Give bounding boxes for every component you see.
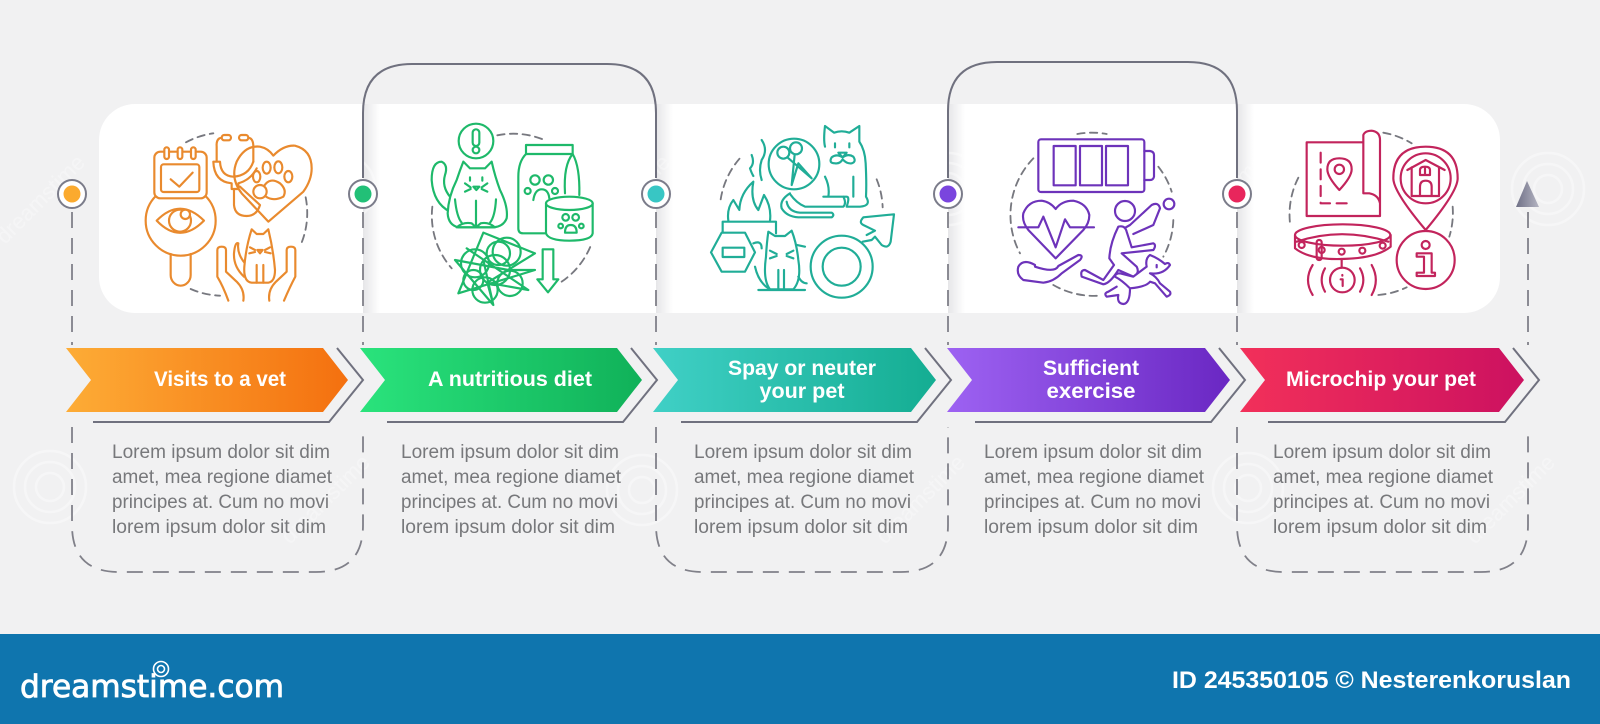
text block 3: amet, mea regione diamet — [694, 467, 915, 488]
watermark: dreamstime — [276, 450, 375, 549]
chevron: spay or neuter your pet — [653, 348, 951, 422]
node: red — [1223, 180, 1251, 208]
text block 3: lorem ipsum dolor sit dim — [694, 517, 908, 538]
node: orange — [58, 180, 86, 208]
watermark: dreamstime — [576, 150, 675, 249]
watermark: dreamstime — [1171, 150, 1270, 249]
chevron: spay or neuter your pet: Spay or neuter — [728, 357, 876, 380]
icon: sufficient exercise — [1010, 133, 1174, 304]
text block 2: principes at. Cum no movi — [401, 492, 618, 513]
chevron: microchip your pet: Microchip your pet — [1286, 368, 1476, 391]
watermark — [0, 150, 1584, 549]
text block 2: lorem ipsum dolor sit dim — [401, 517, 615, 538]
text block 4: lorem ipsum dolor sit dim — [984, 517, 1198, 538]
end arrow: triangle — [1516, 181, 1539, 207]
chevron: sufficient exercise: Sufficient — [1043, 357, 1139, 380]
text block 3: Lorem ipsum dolor sit dim — [694, 442, 912, 463]
chevron: sufficient exercise — [947, 348, 1245, 422]
chevron: visits to a vet — [66, 348, 363, 422]
text block 5: Lorem ipsum dolor sit dim — [1273, 442, 1491, 463]
chevron: a nutritious diet — [360, 348, 657, 422]
text block 1: Lorem ipsum dolor sit dim — [112, 442, 330, 463]
image credit: ID 245350105 © Nesterenkoruslan — [1172, 667, 1571, 694]
chevron: visits to a vet: Visits to a vet — [154, 368, 286, 391]
watermark: dreamstime — [1461, 450, 1560, 549]
text block 4 — [984, 442, 1205, 538]
white icon panel — [99, 104, 1500, 313]
text block 5 — [1273, 442, 1494, 538]
text block 1: lorem ipsum dolor sit dim — [112, 517, 326, 538]
text block 5: lorem ipsum dolor sit dim — [1273, 517, 1487, 538]
icon: vet visits — [146, 133, 312, 301]
text block 5: principes at. Cum no movi — [1273, 492, 1490, 513]
text block 3 — [694, 442, 915, 538]
text block 4: amet, mea regione diamet — [984, 467, 1205, 488]
text block 2: Lorem ipsum dolor sit dim — [401, 442, 619, 463]
footer bar — [0, 634, 1600, 724]
logo: dreamstime.com — [20, 669, 284, 705]
text block 1: amet, mea regione diamet — [112, 467, 333, 488]
text block 5: amet, mea regione diamet — [1273, 467, 1494, 488]
chevron: microchip your pet — [1240, 348, 1539, 422]
watermark: dreamstime — [871, 450, 970, 549]
chevron: a nutritious diet: A nutritious diet — [428, 368, 592, 391]
node: teal — [642, 180, 670, 208]
text block 2: amet, mea regione diamet — [401, 467, 622, 488]
text block 2 — [401, 442, 622, 538]
text block 1: principes at. Cum no movi — [112, 492, 329, 513]
icon: nutritious diet — [432, 124, 593, 305]
text block 1 — [112, 442, 333, 538]
node: purple — [934, 180, 962, 208]
chevron: sufficient exercise: exercise — [1046, 380, 1136, 403]
text block 4: principes at. Cum no movi — [984, 492, 1201, 513]
node: green — [349, 180, 377, 208]
text block 4: Lorem ipsum dolor sit dim — [984, 442, 1202, 463]
connector: dashed lines and bottom loops — [72, 212, 1528, 572]
text block 3: principes at. Cum no movi — [694, 492, 911, 513]
connector: top loops — [363, 62, 1237, 178]
icon: spay or neuter — [711, 126, 894, 298]
icon: microchip — [1290, 131, 1458, 295]
chevron: spay or neuter your pet: your pet — [760, 380, 845, 403]
